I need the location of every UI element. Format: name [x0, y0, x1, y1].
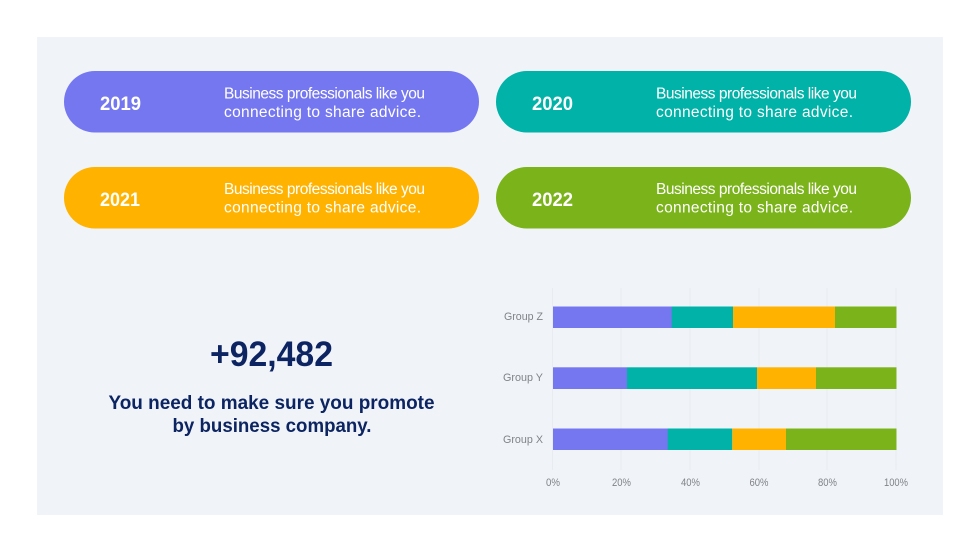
axis labels: 20% [612, 477, 631, 489]
category labels [503, 311, 544, 446]
pill: 2020: 2020 [532, 94, 573, 115]
pill: 2022: Business professionals like you [656, 181, 857, 198]
bar: Group Y [553, 367, 896, 389]
pill: 2019: Business professionals like you [224, 86, 425, 102]
axis labels: 40% [681, 477, 700, 489]
statement text: You need to make sure you promote [108, 393, 434, 414]
category labels: Group Y [503, 372, 544, 384]
axis labels: 60% [750, 477, 769, 489]
pill: 2020: Business professionals like you [656, 86, 857, 102]
pill: 2022 [496, 167, 911, 228]
category labels: Group X [503, 434, 544, 446]
pill: 2022: 2022 [532, 190, 573, 211]
pill: 2019 [64, 71, 479, 132]
pill: 2021: Business professionals like you [224, 181, 425, 198]
pill: 2022: connecting to share advice. [656, 200, 853, 216]
axis labels [546, 477, 908, 489]
axis labels: 0% [546, 477, 560, 489]
bar: Group Z [553, 306, 896, 328]
pill: 2021 [64, 167, 479, 228]
pill: 2020 [496, 71, 911, 132]
statement text: by business company. [172, 416, 372, 437]
pill: 2019: 2019 [100, 94, 141, 115]
pill: 2021: 2021 [100, 190, 140, 211]
pill: 2021: connecting to share advice. [224, 200, 421, 216]
pill: 2019: connecting to share advice. [224, 104, 421, 121]
bar: Group X [553, 428, 896, 450]
statement text [108, 393, 434, 437]
category labels: Group Z [504, 311, 543, 323]
axis labels: 100% [884, 477, 908, 489]
stacked bar chart [503, 288, 908, 489]
pill: 2020: connecting to share advice. [656, 104, 853, 121]
headline number: +92,482 [210, 335, 333, 374]
axis labels: 80% [818, 477, 837, 489]
